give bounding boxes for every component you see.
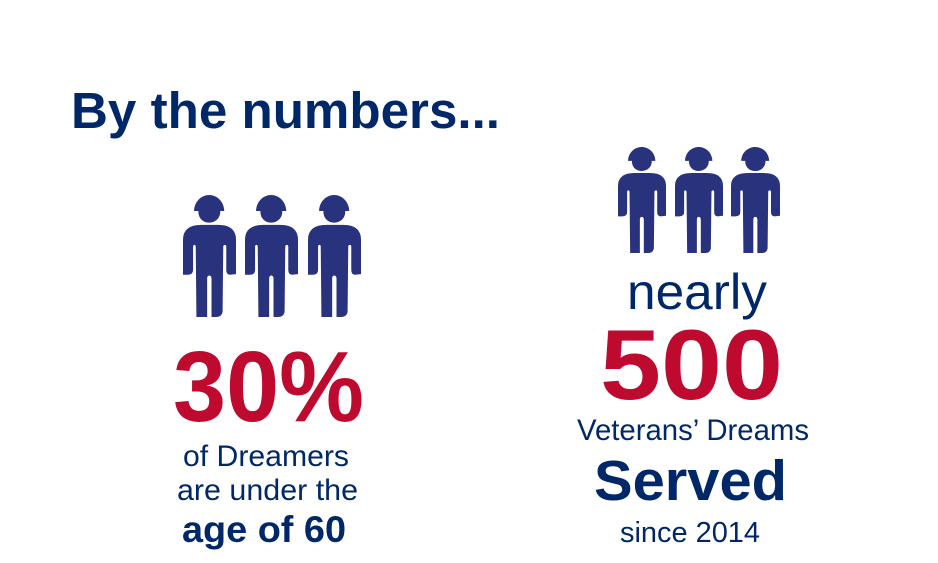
- icon: three people: [183, 195, 361, 317]
- big number: 500: 500: [600, 309, 783, 420]
- title: By the numbers...: [71, 82, 500, 139]
- text: Served: Served: [594, 449, 787, 513]
- text: nearly: nearly: [627, 264, 767, 320]
- text: age of 60: age of 60: [182, 509, 346, 550]
- text: since 2014: since 2014: [620, 517, 760, 549]
- text: are under the: are under the: [177, 474, 358, 507]
- text: Veterans' Dreams: Veterans’ Dreams: [577, 414, 809, 447]
- icon: three people: [618, 147, 780, 253]
- text: of Dreamers: of Dreamers: [183, 440, 349, 473]
- big number: 30%: 30%: [173, 331, 364, 443]
- panel: 30 percent statistic: [173, 195, 364, 550]
- panel: 500 veterans statistic: [577, 147, 809, 549]
